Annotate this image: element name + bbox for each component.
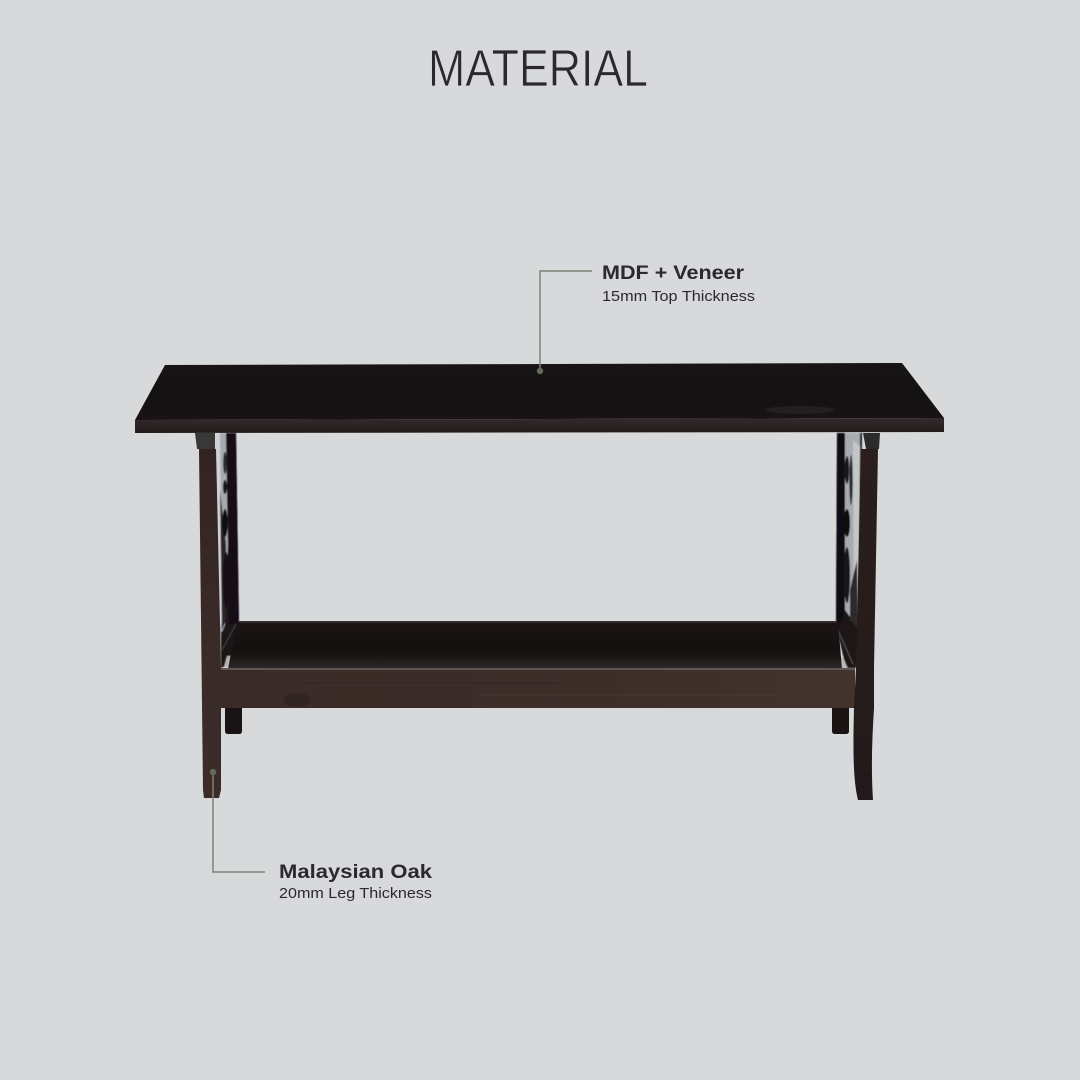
leader line [213, 772, 265, 872]
callout detail: 15mm Top Thickness [602, 288, 755, 305]
callout detail: 20mm Leg Thickness [279, 885, 432, 902]
front left leg [195, 433, 221, 798]
front right leg [853, 433, 880, 800]
callout: MDF + Veneer [537, 263, 755, 374]
callout heading: Malaysian Oak [279, 862, 432, 883]
callout: Malaysian Oak [210, 769, 432, 902]
left side panel [216, 433, 239, 668]
front rail [221, 669, 855, 708]
lower shelf [221, 621, 855, 708]
anchor dot [210, 769, 216, 775]
title: MATERIAL [428, 40, 648, 98]
back legs [225, 706, 849, 734]
right side panel [836, 433, 862, 672]
leader line [540, 271, 592, 371]
table top [135, 363, 944, 433]
table illustration [135, 363, 944, 800]
callout heading: MDF + Veneer [602, 263, 745, 284]
anchor dot [537, 368, 543, 374]
